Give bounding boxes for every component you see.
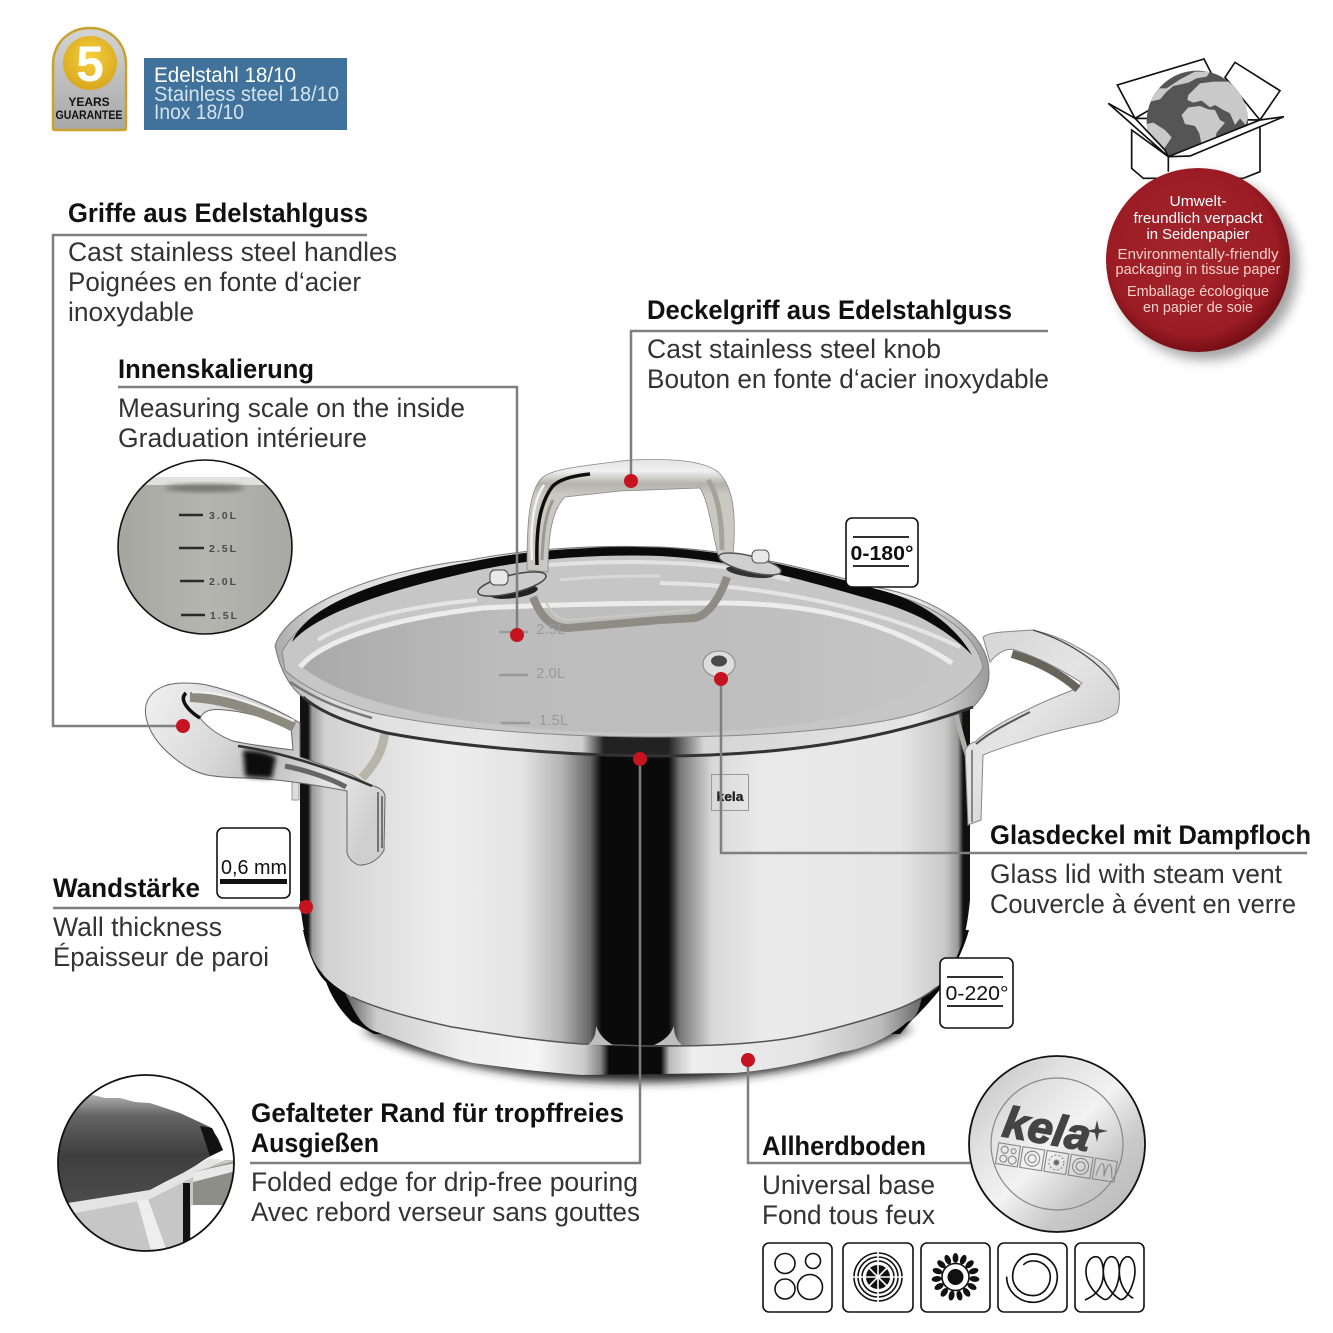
callout: handles — [68, 198, 397, 327]
detail circle: measuring scale — [115, 458, 295, 638]
callout: universal base: Fond tous feux — [762, 1200, 935, 1230]
callout: glass lid: Glass lid with steam vent — [990, 859, 1282, 889]
callout: handles: Poignées en fonte d‘acier — [68, 267, 361, 297]
right handle — [965, 630, 1119, 825]
badge: pot heat resistance: 0-220° — [946, 983, 1008, 1005]
eco packaging seal: Umwelt- — [1170, 194, 1227, 210]
callout: wall thickness: Wall thickness — [53, 912, 222, 942]
detail circle: measuring scale: 2.0L — [209, 576, 237, 588]
black back wall of the pot — [292, 547, 972, 655]
eco packaging seal: Environmentally-friendly — [1118, 247, 1279, 263]
callout leader lines — [53, 235, 1307, 1163]
badge: lid heat resistance — [846, 518, 918, 587]
callout: knob: Deckelgriff aus Edelstahlguss — [647, 295, 1012, 325]
lid knob handle — [476, 460, 783, 601]
callout: knob: Bouton en fonte d‘acier inoxydable — [647, 364, 1049, 394]
badge: wall thickness: 0,6 mm — [221, 857, 287, 879]
callout: universal base — [762, 1131, 935, 1230]
callout: folded edge: Ausgießen — [251, 1128, 379, 1158]
inside measuring marks — [499, 621, 568, 729]
pot opening seen through glass — [302, 605, 950, 733]
eco packaging seal: in Seidenpapier — [1146, 227, 1250, 243]
base foot band — [345, 993, 922, 1075]
detail circle: measuring scale: 3.0L — [209, 510, 237, 522]
eco packaging seal: freundlich verpackt — [1134, 211, 1262, 227]
icon: gas flame hob — [921, 1243, 990, 1312]
callout: handles: Cast stainless steel handles — [68, 237, 397, 267]
inside measuring marks: 1.5L — [539, 712, 568, 729]
detail circle: measuring scale: 1.5L — [210, 610, 238, 622]
eco packaging seal: en papier de soie — [1143, 300, 1253, 316]
kela tag: kela — [716, 790, 745, 804]
lid rim — [275, 546, 989, 756]
lid handle reflection — [533, 577, 727, 628]
steam vent — [703, 651, 735, 677]
pot shadow — [362, 1020, 912, 1082]
callout: wall thickness: Épaisseur de paroi — [53, 942, 269, 972]
red marker dots — [176, 474, 755, 1067]
black wedge behind base — [303, 930, 969, 1034]
badge: lid heat resistance: 0-180° — [850, 543, 914, 565]
icon: electric plate hob — [843, 1243, 913, 1312]
kela tag — [712, 774, 748, 810]
icon: induction hob — [998, 1243, 1067, 1312]
callout: knob — [647, 295, 1049, 394]
callout: handles: Griffe aus Edelstahlguss — [68, 198, 368, 228]
material label: Edelstahl 18/10 — [154, 64, 296, 87]
callout: wall thickness — [53, 873, 269, 972]
callout: measuring scale — [118, 354, 465, 453]
guarantee badge: 5 — [76, 36, 104, 92]
icon: gas hob — [763, 1243, 832, 1312]
callout: measuring scale: Measuring scale on the inside — [118, 393, 465, 423]
material label: Inox 18/10 — [154, 101, 244, 124]
detail circle: measuring scale: 2.5L — [209, 543, 237, 555]
material label — [144, 58, 347, 130]
guarantee badge: GUARANTEE — [56, 108, 122, 122]
callout: glass lid: Couvercle à évent en verre — [990, 889, 1296, 919]
material label: Stainless steel 18/10 — [154, 83, 339, 106]
callout: glass lid: Glasdeckel mit Dampfloch — [990, 820, 1311, 850]
callout: folded edge: Folded edge for drip-free pouring — [251, 1167, 638, 1197]
badge: pot heat resistance — [940, 958, 1013, 1028]
cooking pot — [145, 460, 1119, 1082]
guarantee badge — [53, 28, 126, 130]
callout: folded edge: Avec rebord verseur sans gouttes — [251, 1197, 640, 1227]
left handle — [145, 683, 385, 865]
pot body — [300, 690, 970, 1046]
icon: globe in box — [1108, 59, 1284, 178]
detail circle: pot base: kela — [999, 1098, 1094, 1161]
eco packaging seal — [1106, 168, 1298, 360]
detail circle: folded edge — [55, 1072, 240, 1254]
inside measuring marks: 2.0L — [536, 665, 565, 682]
detail circle: pot base — [969, 1056, 1145, 1232]
badge: wall thickness — [217, 828, 290, 898]
callout: folded edge — [251, 1098, 640, 1227]
eco packaging seal: packaging in tissue paper — [1116, 262, 1281, 278]
inside measuring marks: 2.5L — [536, 621, 565, 638]
callout: folded edge: Gefalteter Rand für tropffreies — [251, 1098, 624, 1128]
callout: knob: Cast stainless steel knob — [647, 334, 941, 364]
callout: measuring scale: Innenskalierung — [118, 354, 314, 384]
eco packaging seal: Emballage écologique — [1127, 284, 1269, 300]
callout: wall thickness: Wandstärke — [53, 873, 200, 903]
handle brackets — [362, 733, 385, 778]
callout: glass lid — [990, 820, 1311, 919]
callout: handles: inoxydable — [68, 297, 194, 327]
callout: universal base: Allherdboden — [762, 1131, 926, 1161]
guarantee badge: YEARS — [68, 95, 110, 109]
callout: universal base: Universal base — [762, 1170, 935, 1200]
glass lid — [282, 550, 983, 737]
icon: halogen hob — [1075, 1243, 1144, 1312]
callout: measuring scale: Graduation intérieure — [118, 423, 367, 453]
